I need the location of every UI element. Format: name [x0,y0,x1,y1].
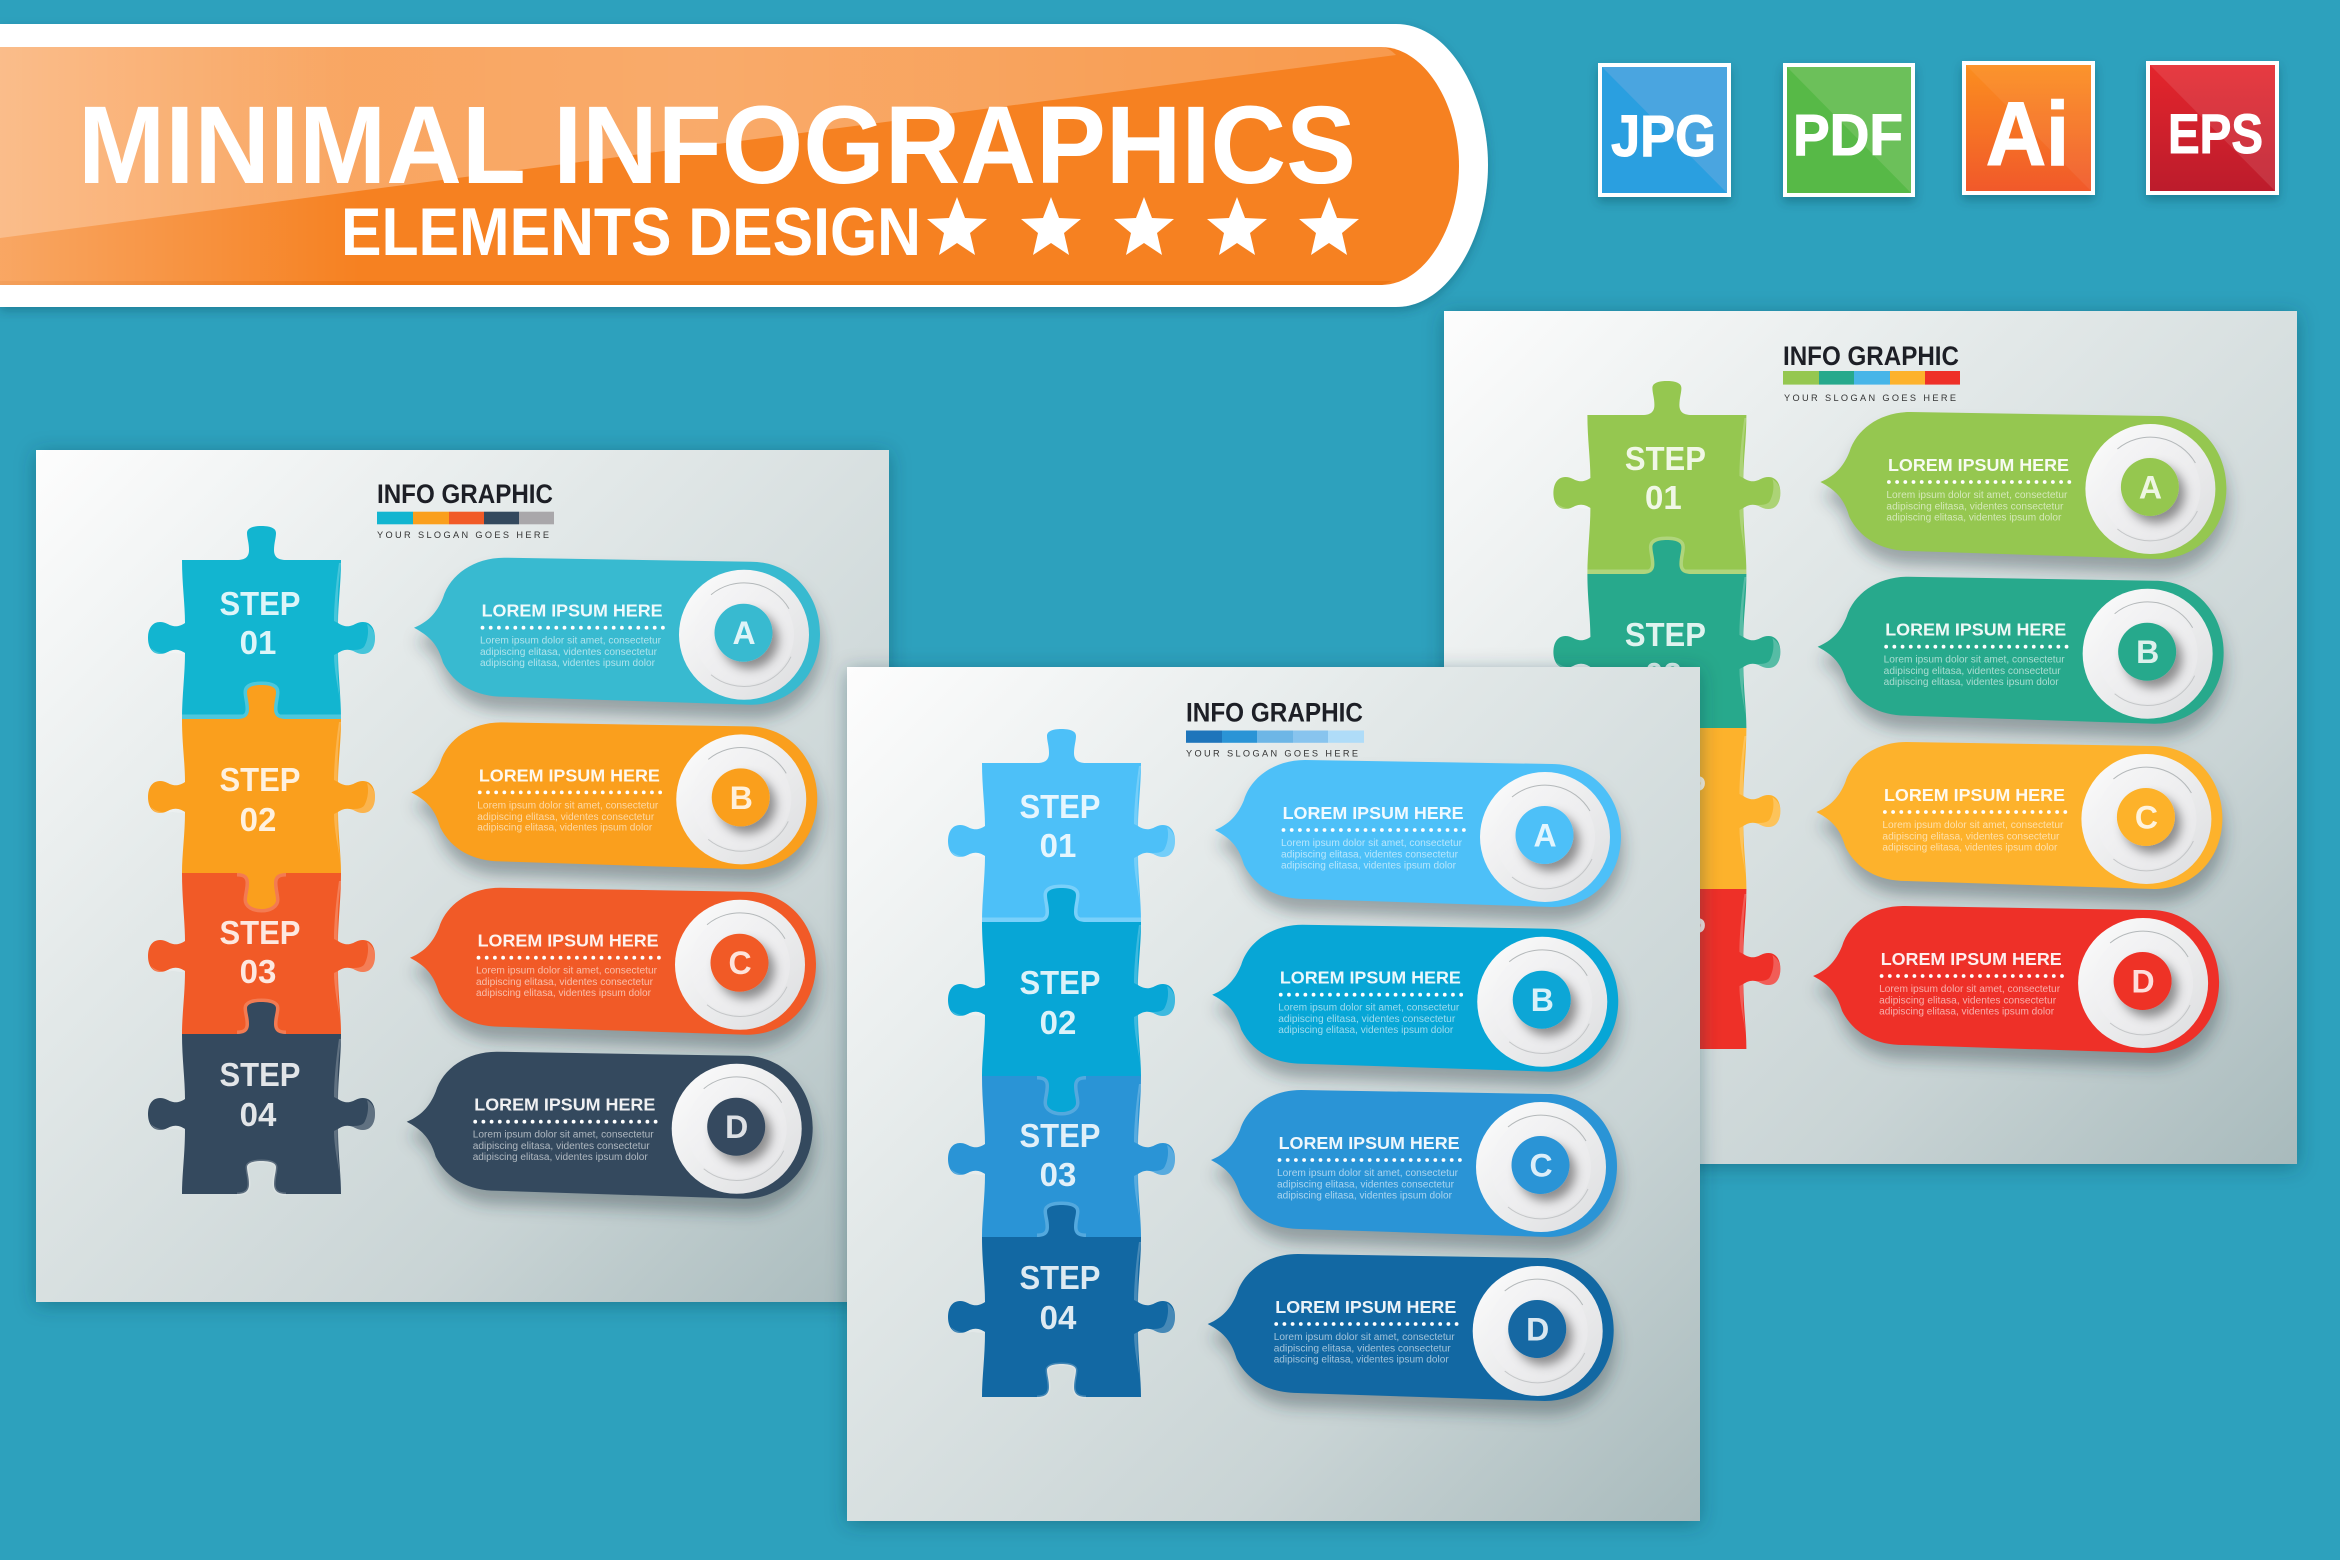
icon: PDF badge: PDF [1793,103,1903,168]
bubble: B: adipiscing elitasa, videntes ipsum dolor [1278,1025,1454,1036]
puzzle piece: step 04: STEP [1020,1259,1100,1296]
puzzle piece: step 01: STEP [1625,440,1706,477]
puzzle piece: step 04: 04 [240,1096,277,1133]
bubble: D: D [725,1109,748,1145]
bubble: C: C [728,945,752,981]
bubble: C: Lorem ipsum dolor sit amet, consectetur [476,966,658,977]
bubble: C: C [1529,1148,1553,1184]
bubble: A: adipiscing elitasa, videntes ipsum dolor [1886,512,2062,523]
bubble: D: D [2132,964,2155,1000]
bubble: D [1813,906,2221,1067]
bubble: D: Lorem ipsum dolor sit amet, consectetur [1879,984,2061,995]
puzzle piece: step 01 [948,729,1175,922]
puzzle piece: step 04 [948,1205,1175,1397]
bubble: A [414,558,822,719]
puzzle piece: step 01: STEP [220,585,300,622]
puzzle piece: step 03: STEP [1020,1117,1100,1154]
icon: Ai badge [1962,61,2095,195]
bubble: A: A [2139,470,2162,506]
bubble: B: adipiscing elitasa, videntes consectetur [1278,1014,1456,1025]
puzzle piece: step 02: STEP [1625,616,1706,653]
banner title: MINIMAL INFOGRAPHICS [78,84,1356,207]
icon: JPG badge [1598,63,1731,197]
puzzle piece: step 01 [148,526,375,719]
bubble: D [407,1052,815,1213]
bubble: B [1212,925,1620,1086]
bubble: B: B [2136,634,2159,670]
bubble: D: Lorem ipsum dolor sit amet, consectetur [1274,1332,1455,1343]
bubble: A: LOREM IPSUM HERE [1888,455,2069,475]
bubble: C: adipiscing elitasa, videntes ipsum dolor [1277,1190,1453,1201]
heading: info graphic logo: INFO GRAPHIC [1186,698,1363,728]
bubble: D [1208,1254,1616,1415]
bubble: C: adipiscing elitasa, videntes consectetur [476,977,654,988]
bubble: A: adipiscing elitasa, videntes ipsum dolor [1281,860,1457,871]
banner subtitle: ELEMENTS DESIGN [341,194,921,270]
bubble: A: Lorem ipsum dolor sit amet, consectetur [1281,838,1463,849]
bubble: C [1211,1090,1619,1251]
puzzle piece: step 04: 04 [1645,951,1682,988]
puzzle piece: step 04: 04 [1040,1299,1077,1336]
bubble: B: LOREM IPSUM HERE [1280,968,1461,988]
bubble: A: A [732,615,756,651]
panel: teal, orange and navy version [36,450,889,1302]
puzzle piece: step 02 [148,685,375,909]
puzzle piece: step 02 [1553,540,1780,764]
bubble: D: LOREM IPSUM HERE [474,1095,655,1115]
heading: info graphic logo: YOUR SLOGAN GOES HERE [1784,393,1956,403]
bubble: D: LOREM IPSUM HERE [1881,949,2062,969]
panel: blue version [847,667,1700,1521]
heading: info graphic logo: YOUR SLOGAN GOES HERE [377,530,549,540]
puzzle piece: step 01: 01 [1645,479,1682,516]
bubble: C: C [2135,800,2158,836]
puzzle piece: step 03: 03 [240,953,276,990]
bubble: B: Lorem ipsum dolor sit amet, consectetur [1278,1003,1460,1014]
puzzle piece: step 02 [948,888,1175,1112]
bubble list [1208,760,1623,1415]
puzzle piece: step 02: 02 [1645,656,1682,693]
bubble: B: B [1531,982,1554,1018]
bubble: D: adipiscing elitasa, videntes consectetur [473,1141,650,1152]
bubble: A: LOREM IPSUM HERE [1283,803,1464,823]
title banner [0,24,1488,307]
heading: info graphic logo [1783,341,1960,403]
bubble: B: Lorem ipsum dolor sit amet, consectetur [477,800,659,811]
puzzle piece: step 03 [948,1076,1175,1237]
puzzle piece: step 04 [1553,857,1780,1049]
puzzle piece: step 04 [148,1002,375,1194]
heading: info graphic logo: INFO GRAPHIC [1783,341,1959,371]
icon: five stars [927,197,1359,255]
bubble: D: Lorem ipsum dolor sit amet, consectetur [473,1130,654,1141]
icon: JPG badge: JPG [1611,104,1716,169]
puzzle column [948,729,1175,1397]
puzzle piece: step 03: 03 [1645,808,1682,845]
bubble: C: LOREM IPSUM HERE [1279,1133,1460,1153]
bubble: C: adipiscing elitasa, videntes consectetur [1277,1179,1455,1190]
bubble: D: LOREM IPSUM HERE [1275,1297,1456,1317]
icon: PDF badge [1783,63,1915,197]
bubble: A: adipiscing elitasa, videntes consectetur [480,647,658,658]
puzzle piece: step 03 [1553,728,1780,889]
bubble: B: B [730,780,753,816]
bubble: A: Lorem ipsum dolor sit amet, consectetur [480,636,662,647]
bubble list [1813,412,2228,1067]
bubble: B [411,722,819,883]
puzzle piece: step 01 [1553,381,1780,574]
puzzle column [148,526,375,1194]
bubble: A: adipiscing elitasa, videntes consectetur [1886,501,2064,512]
puzzle piece: step 01: STEP [1020,788,1100,825]
bubble: B: adipiscing elitasa, videntes consectetur [1884,666,2061,677]
bubble list [407,558,822,1213]
bubble: B: adipiscing elitasa, videntes ipsum dolor [1884,677,2059,688]
bubble: A: A [1533,818,1557,854]
heading: info graphic logo [1186,698,1364,758]
bubble: D: adipiscing elitasa, videntes consectetur [1274,1343,1451,1354]
bubble: C: adipiscing elitasa, videntes ipsum dolor [476,988,652,999]
puzzle piece: step 01: 01 [240,624,276,661]
bubble: D: adipiscing elitasa, videntes consectetur [1879,995,2057,1006]
puzzle piece: step 01: 01 [1040,827,1076,864]
panel: green, yellow and red version [1444,311,2297,1164]
bubble: C [1816,742,2224,903]
bubble: C: Lorem ipsum dolor sit amet, consectetur [1277,1168,1459,1179]
puzzle piece: step 03: STEP [220,914,300,951]
bubble: D: adipiscing elitasa, videntes ipsum dolor [473,1152,648,1163]
puzzle piece: step 03: STEP [1625,769,1706,806]
puzzle piece: step 02: STEP [220,761,300,798]
bubble: B: LOREM IPSUM HERE [1885,620,2066,640]
bubble: C [410,888,818,1049]
bubble: C: LOREM IPSUM HERE [1884,785,2065,805]
puzzle piece: step 02: 02 [1040,1004,1076,1041]
bubble: D: adipiscing elitasa, videntes ipsum dolor [1274,1354,1449,1365]
bubble: B [1818,577,2226,738]
bubble: B: adipiscing elitasa, videntes ipsum dolor [477,823,653,834]
icon: EPS badge [2146,61,2279,195]
heading: info graphic logo [377,479,554,540]
bubble: A [1820,412,2228,573]
puzzle piece: step 02: 02 [240,801,276,838]
puzzle piece: step 03: 03 [1040,1156,1076,1193]
bubble: D: D [1526,1312,1549,1348]
puzzle piece: step 04: STEP [1625,911,1706,948]
icon: EPS badge: EPS [2168,102,2263,165]
bubble: A: LOREM IPSUM HERE [482,601,663,621]
bubble: C: adipiscing elitasa, videntes consectetur [1882,831,2060,842]
puzzle piece: step 04: STEP [220,1056,300,1093]
heading: info graphic logo: YOUR SLOGAN GOES HERE [1186,748,1358,758]
bubble: A: adipiscing elitasa, videntes ipsum dolor [480,658,656,669]
bubble: C: Lorem ipsum dolor sit amet, consectetur [1882,820,2064,831]
bubble: A: adipiscing elitasa, videntes consectetur [1281,849,1459,860]
bubble: A: Lorem ipsum dolor sit amet, consectetur [1886,490,2068,501]
puzzle column [1553,381,1780,1049]
icon: Ai badge: Ai [1986,85,2069,185]
bubble: B: LOREM IPSUM HERE [479,765,660,785]
puzzle piece: step 03 [148,873,375,1034]
bubble: C: adipiscing elitasa, videntes ipsum dolor [1882,842,2058,853]
heading: info graphic logo: INFO GRAPHIC [377,479,553,509]
bubble: D: adipiscing elitasa, videntes ipsum dolor [1879,1006,2055,1017]
bubble: B: Lorem ipsum dolor sit amet, consectetur [1884,655,2065,666]
bubble: B: adipiscing elitasa, videntes consectetur [477,812,655,823]
puzzle piece: step 02: STEP [1020,964,1100,1001]
bubble: A [1215,760,1623,921]
bubble: C: LOREM IPSUM HERE [478,931,659,951]
